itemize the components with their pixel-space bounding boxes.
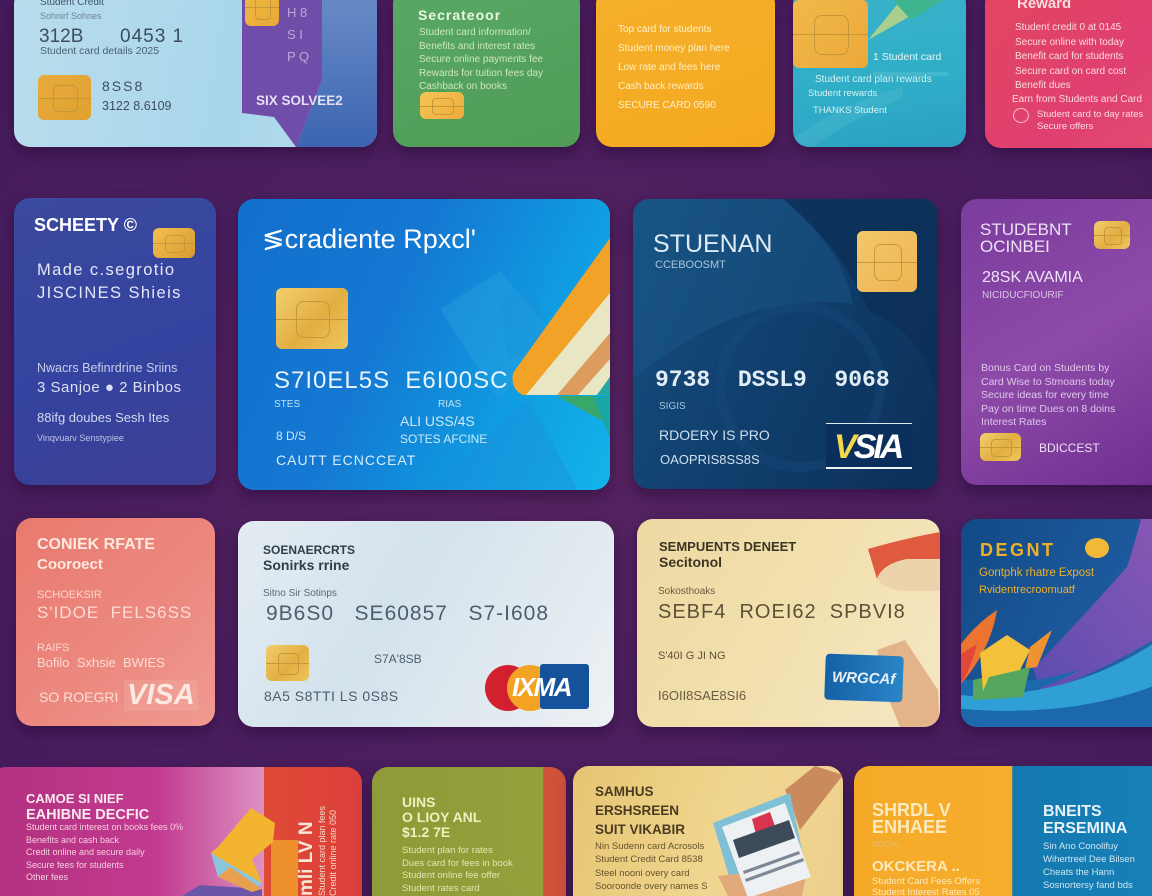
panel: colourful blue card: Gontphk rhatre Expost xyxy=(979,567,1094,579)
panel: olive card: $1.2 7E xyxy=(402,824,450,840)
panel: indigo card: Nwacrs Befinrdrine Sriins xyxy=(37,361,177,375)
icon: visa logo: VSIA xyxy=(834,428,901,466)
panel: green card: Benefits and interest rates xyxy=(419,40,535,52)
panel: bright blue card: RIAS xyxy=(438,399,461,410)
panel: orange card: Cash back rewards xyxy=(618,81,704,92)
panel: green card: Secure online payments fee xyxy=(419,54,543,65)
panel: indigo card: 3 Sanjoe ● 2 Binbos xyxy=(37,379,182,396)
panel: light blue card: 0453 1 xyxy=(120,26,184,47)
panel: salmon card: Bofilo Sxhsie BWIES xyxy=(37,655,165,670)
panel: cream card: I6OII8SAE8SI6 xyxy=(658,688,746,703)
panel: olive card: Student rates card xyxy=(402,882,480,894)
panel: teal card: Student card plan rewards xyxy=(815,74,932,85)
panel: green card: Cashback on books xyxy=(419,81,507,92)
panel: purple card xyxy=(961,199,1152,485)
panel: orange and blue card: OKCKERA .. xyxy=(872,858,960,875)
panel: purple card: Secure ideas for every time xyxy=(981,389,1109,401)
panel: light blue card: 312B xyxy=(39,26,83,47)
panel: indigo card: 88ifg doubes Sesh Ites xyxy=(37,410,169,425)
panel: orange and blue card: ENHAEE xyxy=(872,817,947,837)
panel: red card: Benefit card for students xyxy=(1015,51,1123,62)
panel: orange and blue card xyxy=(854,766,1152,896)
panel: salmon card: SCHOEKSIR xyxy=(37,589,102,601)
panel: tan card: SAMHUS xyxy=(595,784,654,799)
panel: purple card: 28SK AVAMIA xyxy=(982,269,1083,286)
panel: indigo card: Vinqvuarv Senstypiee xyxy=(37,433,124,443)
panel: purple card: Pay on time Dues on 8 doins xyxy=(981,402,1115,414)
panel: magenta card: Benefits and cash back xyxy=(26,835,119,845)
panel: bright blue card: S7I0EL5S E6I00SC xyxy=(274,367,508,394)
panel: tan card: Sooroonde overy names S xyxy=(595,881,707,892)
panel: cream card: Sokosthoaks xyxy=(658,586,715,597)
panel: orange and blue card: ERSEMINA xyxy=(1043,820,1127,837)
panel: cream card xyxy=(637,519,940,727)
panel: purple card: BDICCEST xyxy=(1039,441,1100,455)
panel: orange card xyxy=(596,0,775,147)
panel: red card xyxy=(985,0,1152,148)
panel: magenta card: Student card plan fees xyxy=(317,806,327,896)
panel: teal card: THANKS Student xyxy=(813,105,887,116)
panel: salmon card: SO ROEGRI xyxy=(39,689,118,705)
panel: salmon card: S'IDOE FELS6SS xyxy=(37,603,192,622)
panel: light blue card: SIX SOLVEE2 xyxy=(256,93,343,108)
panel: cream card: SEMPUENTS DENEET xyxy=(659,539,796,554)
panel: navy card: OAOPRIS8SS8S xyxy=(660,452,760,467)
panel: olive card xyxy=(372,767,566,896)
panel: purple card: Card Wise to Stmoans today xyxy=(981,376,1115,388)
panel: colourful blue card xyxy=(961,519,1152,727)
panel: indigo card xyxy=(14,198,216,485)
panel: salmon card xyxy=(16,518,215,726)
panel: bright blue card: ALI USS/4S xyxy=(400,413,475,429)
panel: orange card: Student money plan here xyxy=(618,43,730,54)
icon: visa logo: VISA xyxy=(127,679,195,711)
panel: silver card: SOENAERCRTS xyxy=(263,543,355,557)
panel: indigo card: Made c.segrotio xyxy=(37,261,175,279)
panel: navy card: STUENAN xyxy=(653,230,772,258)
panel: red card: Student credit 0 at 0145 xyxy=(1015,22,1121,33)
panel: orange and blue card: SHRDL V xyxy=(872,800,951,820)
panel: silver card xyxy=(238,521,614,727)
panel: light blue card: Sohnirf Sohnes xyxy=(40,11,102,21)
panel: purple card: NICIDUCFIOURIF xyxy=(982,290,1064,301)
panel: light blue card: H 8 xyxy=(287,5,307,20)
panel: orange and blue card: Student Card Fees Offers xyxy=(872,876,980,887)
panel: magenta card: Credit online and secure daily xyxy=(26,847,145,857)
icon: blue card in hand xyxy=(824,654,904,702)
panel: bright blue card: SOTES AFCINE xyxy=(400,432,487,446)
panel: bright blue card: 8 D/S xyxy=(276,429,306,443)
panel: magenta card: Student card interest on books fees 0% xyxy=(26,822,183,832)
panel: green card xyxy=(393,0,580,147)
panel: magenta card: Other fees xyxy=(26,872,68,882)
panel: light blue card: Student card details 2025 xyxy=(40,45,159,57)
icon: round badge xyxy=(1013,108,1029,123)
panel: purple card: Interest Rates xyxy=(981,416,1046,428)
icon: blue card in hand: WRGCAf xyxy=(832,669,896,688)
panel: orange and blue card: SOCIAL xyxy=(872,840,901,849)
panel: navy card: 9738 DSSL9 9068 xyxy=(655,367,890,393)
panel: teal card xyxy=(793,0,966,147)
panel: silver card: Sonirks rrine xyxy=(263,557,349,573)
panel: silver card: S7A'8SB xyxy=(374,652,422,666)
panel: orange and blue card: BNEITS xyxy=(1043,803,1102,820)
panel: orange and blue card: Wihertreel Dee Bilsen xyxy=(1043,854,1135,865)
panel: light blue card: S I xyxy=(287,27,303,42)
panel: bright blue card xyxy=(238,199,610,490)
panel: olive card: Dues card for fees in book xyxy=(402,858,513,868)
panel: magenta card: mli LV N xyxy=(296,821,317,896)
panel: green card: Student card information/ xyxy=(419,27,531,38)
panel: cream card: Secitonol xyxy=(659,554,722,570)
panel: olive card: O LIOY ANL xyxy=(402,809,481,825)
icon: card network logo xyxy=(485,664,589,711)
panel: olive card: Student plan for rates xyxy=(402,845,493,856)
panel: tan card: ERSHSREEN xyxy=(595,803,679,818)
panel: tan card: Student Credit Card 8538 xyxy=(595,854,703,865)
panel: colourful blue card: DEGNT xyxy=(980,540,1056,560)
panel: silver card: Sitno Sir Sotinps xyxy=(263,588,337,599)
icon: visa logo xyxy=(826,423,912,469)
panel: magenta card: Credit online rate 050 xyxy=(328,810,338,896)
panel: red card: Secure online with today xyxy=(1015,36,1124,48)
panel: navy card xyxy=(633,199,938,489)
panel: colourful blue card: Rvidentrecroomuatf xyxy=(979,584,1075,596)
panel: magenta card: CAMOE SI NIEF xyxy=(26,791,124,806)
panel: bright blue card: CAUTT ECNCCEAT xyxy=(276,452,416,468)
panel: purple card: Bonus Card on Students by xyxy=(981,362,1109,374)
panel: navy card: CCEBOOSMT xyxy=(655,259,726,271)
icon: card network logo: IXMA xyxy=(512,672,571,702)
panel: tan card: Steel nooni overy card xyxy=(595,868,690,879)
panel: magenta card xyxy=(0,767,362,896)
panel: cream card: SEBF4 ROEI62 SPBVI8 xyxy=(658,601,906,623)
panel: bright blue card: STES xyxy=(274,399,300,410)
panel: teal card: Student rewards xyxy=(808,88,877,99)
panel: orange and blue card: Cheats the Hann xyxy=(1043,867,1114,878)
panel: red card: Benefit dues xyxy=(1015,80,1071,91)
panel: silver card: 8A5 S8TTI LS 0S8S xyxy=(264,688,399,704)
panel: indigo card: JISCINES Shieis xyxy=(37,284,182,302)
panel: purple card: STUDEBNT xyxy=(980,220,1072,239)
panel: salmon card: CONIEK RFATE xyxy=(37,536,155,553)
panel: magenta card: EAHIBNE DECFIC xyxy=(26,807,149,823)
panel: silver card: 9B6S0 SE60857 S7-I608 xyxy=(266,602,549,625)
panel: red card: Secure card on card cost xyxy=(1015,66,1126,76)
panel: light blue card: 3122 8.6109 xyxy=(102,99,172,113)
panel: orange card: SECURE CARD 0590 xyxy=(618,100,716,111)
panel: olive card: Student online fee offer xyxy=(402,870,500,881)
panel: light blue card: 8SS8 xyxy=(102,78,144,94)
panel: bright blue card: ≶cradiente Rpxcl' xyxy=(262,224,476,254)
panel: olive card: UINS xyxy=(402,794,435,810)
panel: orange and blue card: Sin Ano Conolifuy xyxy=(1043,841,1118,852)
panel: red card: Student card to day rates xyxy=(1037,109,1143,120)
panel: tan card xyxy=(573,766,843,896)
panel: light blue card: P Q xyxy=(287,49,309,64)
panel: navy card: SIGIS xyxy=(659,401,686,412)
panel: tan card: SUIT VIKABIR xyxy=(595,822,685,837)
panel: salmon card: RAIFS xyxy=(37,642,69,654)
panel: light blue card xyxy=(14,0,377,147)
panel: green card: Secrateoor xyxy=(418,7,501,23)
panel: red card: Secure offers xyxy=(1037,121,1093,132)
panel: cream card: S'40I G JI NG xyxy=(658,650,726,662)
panel: navy card: RDOERY IS PRO xyxy=(659,427,770,443)
panel: teal card: 1 Student card xyxy=(873,51,941,63)
panel: red card: Earn from Students and Card xyxy=(1012,94,1142,105)
panel: green card: Rewards for tuition fees day xyxy=(419,68,543,78)
panel: indigo card: SCHEETY © xyxy=(34,215,137,235)
panel: salmon card: Cooroect xyxy=(37,556,103,573)
panel: purple card: OCINBEI xyxy=(980,237,1050,256)
panel: tan card: Nin Sudenn card Acrosols xyxy=(595,841,704,852)
panel: orange card: Low rate and fees here xyxy=(618,62,720,73)
panel: orange card: Top card for students xyxy=(618,24,711,35)
panel: magenta card: Secure fees for students xyxy=(26,860,124,870)
panel: orange and blue card: Sosnortersy fand bds xyxy=(1043,880,1133,891)
